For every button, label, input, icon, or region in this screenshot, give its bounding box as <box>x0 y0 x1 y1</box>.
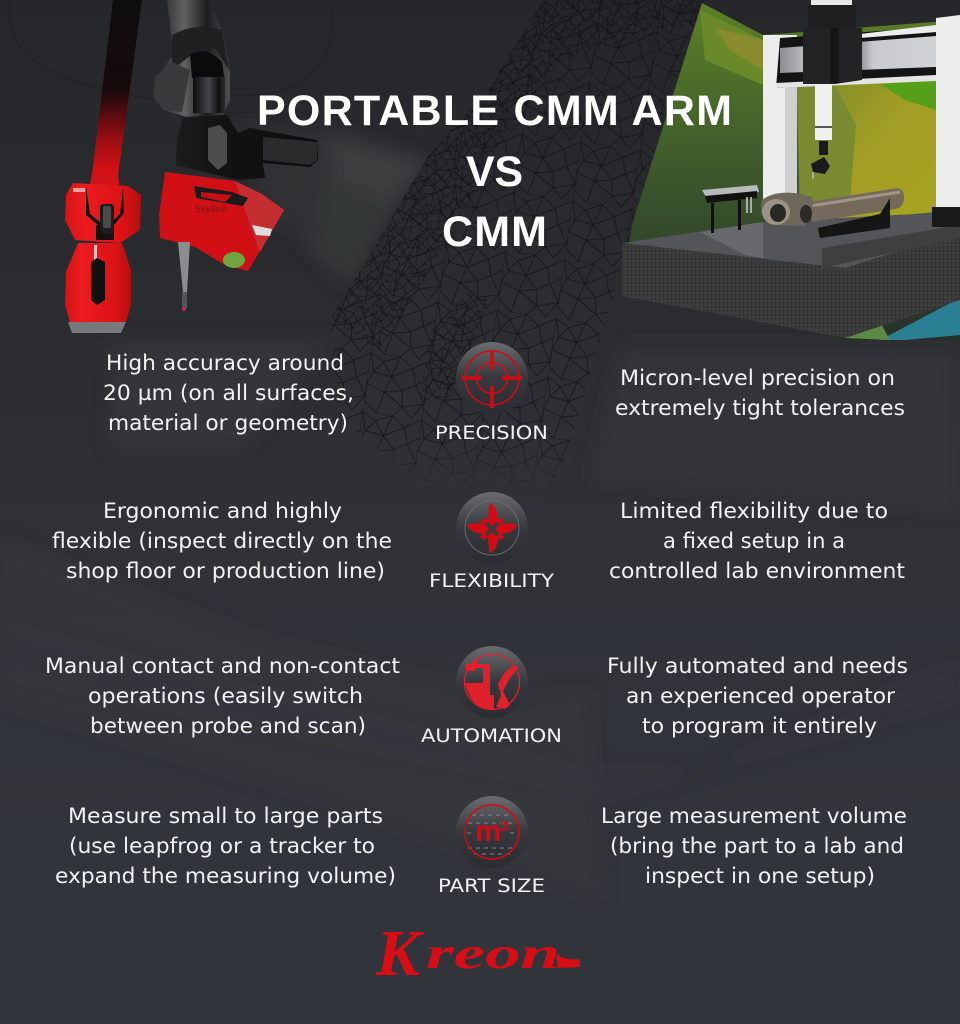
logo: Kreon: K <box>375 917 424 990</box>
illustration: coordinate measuring machine <box>622 0 960 338</box>
probe rack <box>702 185 759 233</box>
row: automation, CMM text: Fully automated and needs <box>607 654 908 678</box>
row: automation, CMM text: an experienced operator <box>626 684 895 708</box>
row: automation, portable arm text: between probe and scan) <box>90 714 366 738</box>
row: automation, portable arm text: Manual contact and non-contact <box>45 654 400 678</box>
carbon tube <box>92 0 142 175</box>
illustration: portable arm <box>65 0 318 333</box>
mesh band <box>330 0 704 480</box>
row: precision, portable arm text: 20 µm (on all surfaces, <box>103 381 354 405</box>
row: precision, portable arm text: High accuracy around <box>106 351 344 375</box>
row: automation, CMM text: to program it entirely <box>642 714 877 738</box>
title: PORTABLE CMM ARM <box>257 87 732 135</box>
logo: Kreon: reon <box>426 929 560 978</box>
row: part size, portable arm text <box>55 804 396 888</box>
row: part size, CMM text: (bring the part to a lab and <box>610 834 904 858</box>
icon: part size <box>456 796 528 868</box>
row: precision, portable arm text <box>103 351 354 435</box>
title: CMM <box>442 208 547 256</box>
granite table <box>622 207 960 338</box>
workpiece <box>761 188 904 238</box>
illustration: portable arm: Skyline <box>195 205 228 215</box>
row: flexibility, CMM text: controlled lab environment <box>609 559 905 583</box>
label: precision: PRECISION <box>435 422 548 444</box>
row: flexibility, portable arm text: Ergonomic and highly <box>103 499 342 523</box>
row: automation, portable arm text: operations (easily switch <box>88 684 363 708</box>
icon: flexibility arrows <box>456 492 528 564</box>
row: part size, CMM text: inspect in one setup) <box>645 864 875 888</box>
title: VS <box>466 148 523 196</box>
row: flexibility, portable arm text: shop floor or production line) <box>66 559 385 583</box>
icon: precision crosshair <box>456 342 528 414</box>
row: flexibility, CMM text: Limited flexibility due to <box>620 499 888 523</box>
elbow <box>88 173 120 195</box>
row: flexibility, portable arm text: flexible (inspect directly on the <box>52 529 392 553</box>
black wrist and grip <box>176 115 318 180</box>
base <box>68 322 126 333</box>
row: flexibility, CMM text: a fixed setup in a <box>663 529 845 553</box>
row: part size, CMM text <box>601 804 907 888</box>
row: part size, CMM text: Large measurement volume <box>601 804 907 828</box>
row: part size, portable arm text: (use leapfrog or a tracker to <box>69 834 375 858</box>
title <box>257 87 732 256</box>
row: automation, portable arm text <box>45 654 400 738</box>
label: automation: AUTOMATION <box>421 725 562 747</box>
row: flexibility, CMM text <box>609 499 905 583</box>
logo: Kreon <box>375 917 580 990</box>
row: part size, portable arm text: Measure small to large parts <box>68 804 383 828</box>
red scanner head <box>159 172 284 271</box>
row: precision, CMM text: Micron-level precision on <box>620 366 895 390</box>
row: flexibility, portable arm text <box>52 499 392 583</box>
label: part size: PART SIZE <box>438 875 545 897</box>
black upper arm <box>153 0 230 117</box>
handle body <box>65 243 131 322</box>
label: flexibility: FLEXIBILITY <box>429 570 554 592</box>
probe <box>178 242 190 292</box>
gantry <box>763 0 960 210</box>
icon: part size: 3 <box>500 818 508 835</box>
icon: part size: m <box>475 815 501 848</box>
row: precision, portable arm text: material or geometry) <box>108 411 348 435</box>
row: automation, CMM text <box>607 654 908 738</box>
colour map backdrop <box>623 3 960 340</box>
row: precision, CMM text: extremely tight tolerances <box>615 396 905 420</box>
hinge joint <box>65 183 141 243</box>
row: part size, portable arm text: expand the measuring volume) <box>55 864 396 888</box>
icon: automation <box>456 646 528 718</box>
row: precision, CMM text <box>615 366 905 420</box>
